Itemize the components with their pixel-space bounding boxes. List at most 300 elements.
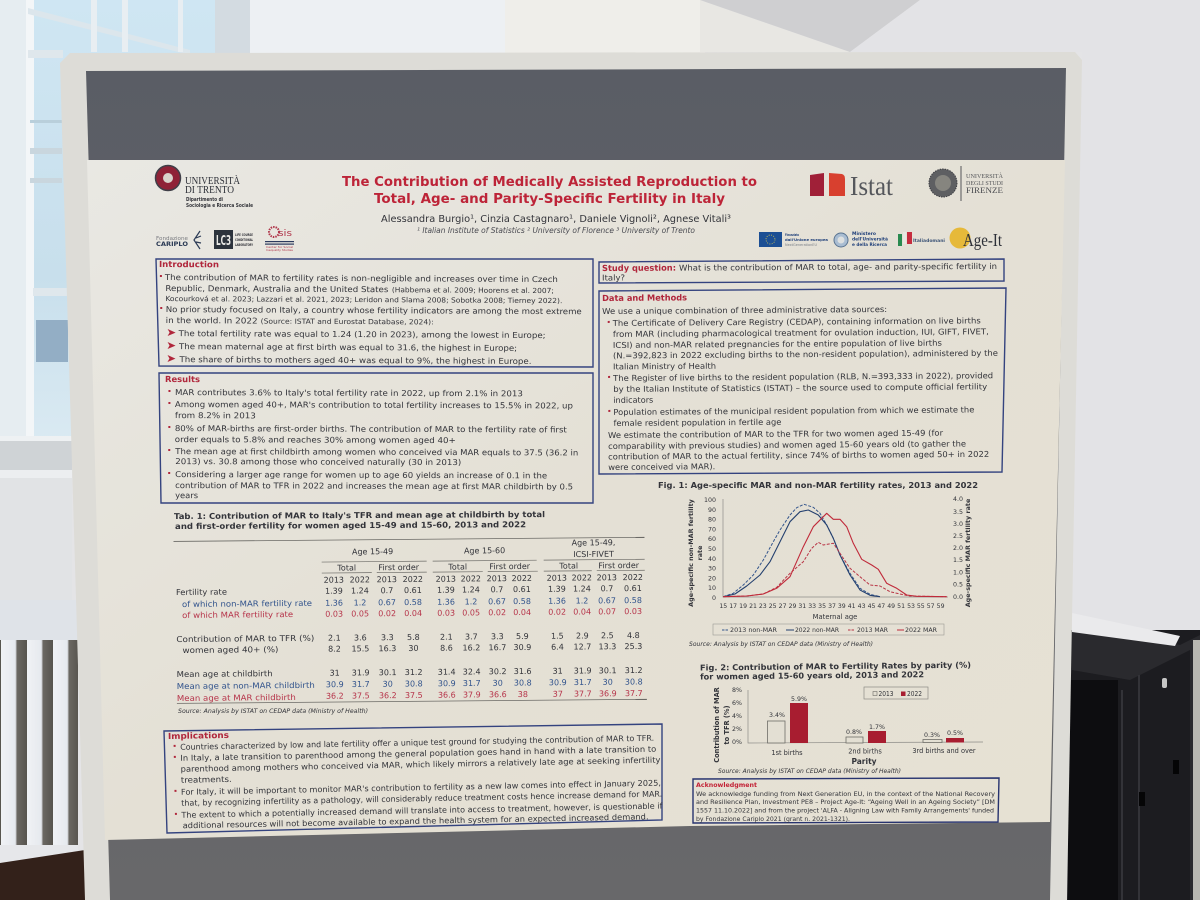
figure 2 source: Source: Analysis by ISTAT on CEDAP data (Ministry of Health) bbox=[718, 767, 901, 775]
logo: Università degli Studi di Firenze bbox=[929, 166, 1003, 201]
series: 2013 MAR bbox=[723, 542, 947, 597]
logo: CSIS: sis bbox=[278, 229, 292, 239]
text: results bullets: years bbox=[175, 491, 198, 500]
panel: study question: What is the contribution of MAR to total, age- and parity-specific fertility in bbox=[679, 262, 997, 273]
heading: implications: Implications bbox=[168, 730, 229, 741]
logo: LC3: CONDITIONAL bbox=[235, 238, 254, 242]
panel: results bbox=[159, 373, 593, 503]
bars: 1st births: 5.9% bbox=[791, 696, 807, 703]
header: title: Total, Age- and Parity-Specific Fertility in Italy bbox=[374, 191, 725, 207]
row: non-MAR fertility rate: 1.2 bbox=[465, 597, 477, 606]
x axis ticks: 37 bbox=[828, 603, 836, 610]
row: MAR fertility rate: 0.05 bbox=[462, 608, 480, 618]
row: contribution of MAR to TFR: 3.7 bbox=[465, 632, 478, 641]
row: non-MAR fertility rate: 0.58 bbox=[404, 598, 422, 607]
table 1 bbox=[173, 510, 647, 715]
text: intro bullets: (Source: ISTAT and Eurostat Database, 2024): bbox=[261, 318, 434, 326]
x axis ticks: 17 bbox=[729, 603, 737, 610]
row: women aged 40+: 16.3 bbox=[378, 644, 396, 653]
row: fertility rate: 0.61 bbox=[624, 584, 642, 593]
row: MAR fertility rate: 0.07 bbox=[598, 607, 616, 616]
right axis ticks: 0.5 bbox=[953, 582, 963, 588]
row: mean age at MAR childbirth: 36.9 bbox=[599, 689, 617, 698]
row: mean age at childbirth: Mean age at childbirth bbox=[177, 669, 273, 679]
panel: implications bbox=[164, 722, 663, 833]
row: fertility rate: 1.39 bbox=[437, 586, 455, 595]
row: non-MAR fertility rate: 0.58 bbox=[513, 597, 531, 606]
legend bbox=[864, 687, 928, 699]
logo: EU funding bbox=[759, 232, 829, 247]
text: implications bullets: additional resources will not become available to expand the health system for an expected increased demand. bbox=[183, 812, 649, 830]
table title bbox=[174, 510, 545, 531]
text: data sources: female resident population in fertile age bbox=[613, 418, 782, 428]
axis titles: Age-specific non-MAR fertility bbox=[687, 498, 695, 607]
left axis ticks: 10 bbox=[708, 585, 716, 592]
column headers: 2022 bbox=[403, 575, 423, 584]
logo: Università di Trento bbox=[156, 166, 254, 209]
row: mean age at childbirth: 31.9 bbox=[352, 668, 370, 677]
y axis title: to TFR (%) bbox=[723, 706, 731, 744]
row: mean age at non-MAR childbirth bbox=[177, 677, 643, 691]
row: non-MAR fertility rate: of which non-MAR fertility rate bbox=[182, 599, 312, 609]
legend: 2022 non-MAR bbox=[795, 627, 840, 634]
text: results bullets: Considering a larger age range for women up to age 60 yields an increase of 0.1 in the bbox=[175, 470, 547, 480]
row: mean age at non-MAR childbirth: 31.7 bbox=[352, 680, 370, 689]
text: results bullets: The mean age at first childbirth among women who conceived via MAR equals to 37.5 (36.2 in bbox=[174, 447, 578, 457]
row: MAR fertility rate bbox=[182, 607, 642, 620]
legend: 2022 bbox=[907, 690, 922, 698]
row: non-MAR fertility rate: 1.36 bbox=[437, 598, 455, 607]
row: women aged 40+: 25.3 bbox=[624, 642, 642, 651]
axis titles: Age-specific MAR fertility rate bbox=[964, 498, 972, 607]
row: mean age at non-MAR childbirth: 30.9 bbox=[438, 679, 456, 688]
row: fertility rate: 1.24 bbox=[573, 584, 591, 594]
text: implications bullets: that, by recognizing infertility as a pathology, will considerably reduce treatment costs hence increase demand for MAR. bbox=[181, 790, 662, 808]
text: estimation approach bbox=[608, 428, 989, 472]
logo: LC3: LABORATORY bbox=[235, 243, 253, 247]
row: fertility rate bbox=[176, 584, 642, 597]
left axis ticks: 50 bbox=[708, 546, 716, 553]
bars: 3rd births and over: 0.3% bbox=[924, 732, 940, 739]
table title: Tab. 1: Contribution of MAR to Italy's TFR and mean age at childbirth by total bbox=[174, 510, 545, 521]
row: women aged 40+: 16.7 bbox=[488, 643, 506, 652]
heading: results: Results bbox=[165, 374, 200, 384]
logo: Università di Trento: Sociologia e Ricerca Sociale bbox=[186, 203, 254, 209]
table title: and first-order fertility for women aged 15-49 and 15-60, 2013 and 2022 bbox=[175, 520, 526, 531]
logo: Fondazione Cariplo: Fondazione bbox=[156, 236, 189, 242]
text: results bullets: 80% of MAR-births are first-order births. The contribution of MAR to the fertility rate of first bbox=[175, 424, 567, 434]
row: non-MAR fertility rate: 1.2 bbox=[354, 598, 366, 607]
row: mean age at childbirth: 31.4 bbox=[438, 668, 456, 677]
row: MAR fertility rate: 0.03 bbox=[325, 610, 343, 619]
row: women aged 40+: 30 bbox=[408, 644, 419, 653]
window bbox=[0, 0, 215, 603]
row: mean age at non-MAR childbirth: 30.8 bbox=[625, 677, 643, 687]
logo: Ministero: Ministero bbox=[852, 231, 876, 236]
text: intro bullets: The mean maternal age at first birth was equal to 31.6, the highest in Europe; bbox=[178, 342, 517, 353]
row: women aged 40+: 6.4 bbox=[551, 643, 564, 652]
heading: introduction: Introduction bbox=[159, 259, 219, 269]
x axis ticks: 43 bbox=[858, 603, 866, 610]
left axis ticks: 80 bbox=[708, 516, 716, 524]
text: data sources: from MAR (including pharmacological treatment for ovulation induction, IUI, GIFT, FIVET, bbox=[613, 327, 989, 339]
row: mean age at non-MAR childbirth: 30 bbox=[383, 680, 393, 689]
row: mean age at childbirth: 31.2 bbox=[625, 666, 643, 675]
text: intro bullets: The share of births to mothers aged 40+ was equal to 9%, the highest in Europe. bbox=[178, 355, 531, 366]
row: women aged 40+: 16.2 bbox=[462, 643, 480, 653]
dark board fabric bbox=[86, 68, 1066, 900]
category labels: 2nd births bbox=[848, 748, 882, 756]
text: results bullets: 2013) vs. 30.8 among those who conceived naturally (30 in 2013) bbox=[175, 457, 461, 467]
x axis ticks: 59 bbox=[937, 603, 945, 610]
row: mean age at childbirth: 31 bbox=[330, 669, 340, 678]
text: intro bullets: No prior study focused on Italy, a country whose fertility indicators are among the most extreme bbox=[166, 305, 582, 316]
row: MAR fertility rate: 0.02 bbox=[488, 608, 506, 617]
text: implications bullets bbox=[174, 734, 663, 830]
series: 2022 non-MAR bbox=[723, 510, 880, 597]
text: estimation approach: were conceived via MAR). bbox=[608, 462, 715, 472]
logo: Università degli Studi di Firenze: DEGLI STUDI bbox=[966, 180, 1003, 187]
row: mean age at non-MAR childbirth: 30.8 bbox=[405, 679, 423, 689]
y ticks: 8% bbox=[732, 687, 742, 694]
row: mean age at non-MAR childbirth: 30 bbox=[493, 679, 503, 688]
x axis ticks: 35 bbox=[818, 603, 826, 610]
header: title: The Contribution of Medically Assisted Reproduction to bbox=[342, 174, 757, 190]
row: mean age at MAR childbirth: Mean age at MAR childbirth bbox=[177, 693, 296, 703]
row: women aged 40+ bbox=[182, 642, 642, 655]
right axis ticks: 3.0 bbox=[953, 521, 963, 528]
logo: CSIS bbox=[265, 227, 294, 252]
row: fertility rate: 0.61 bbox=[513, 585, 531, 594]
logo: Università degli Studi di Firenze: FIRENZE bbox=[966, 186, 1003, 195]
figure 2 title: Fig. 2: Contribution of MAR to Fertility Rates by parity (%) bbox=[700, 661, 971, 672]
text: data sources bbox=[602, 304, 999, 428]
bars: 1st births bbox=[768, 696, 808, 743]
axes bbox=[748, 690, 983, 743]
text: estimation approach: contribution of MAR to the actual fertility, since 74% of births to women aged 50+ in 2022 bbox=[608, 450, 989, 461]
header: title bbox=[342, 174, 757, 207]
panel: study question bbox=[599, 259, 1004, 283]
panel: study question: Italy? bbox=[602, 273, 625, 282]
text: data sources: Population estimates of the municipal resident population from which we estimate the bbox=[613, 405, 974, 417]
column headers: 2022 bbox=[572, 573, 592, 583]
x axis ticks: 15 bbox=[719, 603, 727, 610]
logo: CSIS: Center for Social bbox=[266, 245, 293, 249]
y axis title bbox=[713, 687, 731, 763]
panel: acknowledgment bbox=[693, 778, 999, 823]
row: mean age at MAR childbirth: 37.9 bbox=[463, 690, 481, 699]
text: data sources: The Certificate of Delivery Care Registry (CEDAP), containing information on live births bbox=[612, 316, 981, 328]
row: MAR fertility rate: 0.04 bbox=[573, 607, 591, 617]
row: fertility rate: 0.7 bbox=[491, 585, 503, 594]
x axis ticks: 53 bbox=[907, 603, 915, 610]
legend: 2013 MAR bbox=[857, 627, 889, 634]
logo: Università di Trento: Dipartimento di bbox=[186, 197, 223, 203]
text: results bullets: MAR contributes 3.6% to Italy's total fertility rate in 2022, up from 2.1% in 2013 bbox=[175, 388, 523, 398]
x axis ticks: 29 bbox=[789, 603, 796, 610]
axis titles bbox=[687, 498, 972, 621]
x axis ticks: 45 bbox=[868, 603, 875, 610]
y ticks: 4% bbox=[732, 713, 742, 720]
bars: 3rd births and over: 0.5% bbox=[947, 730, 963, 737]
text: implications bullets: treatments. bbox=[181, 775, 232, 785]
text: data sources: The Register of live births to the resident population (RLB, N.=393,333 in 2022), provided bbox=[612, 371, 993, 383]
row: non-MAR fertility rate: 1.2 bbox=[576, 596, 588, 606]
figure 1: line chart bbox=[658, 481, 978, 648]
logo: LC3: LIFE COURSE bbox=[235, 233, 253, 237]
panel: study question: Study question: bbox=[602, 263, 676, 273]
row: contribution of MAR to TFR: 2.1 bbox=[328, 634, 341, 643]
text: data sources: We use a unique combination of three administrative data sources: bbox=[602, 305, 887, 316]
row: mean age at non-MAR childbirth: 30.8 bbox=[514, 678, 532, 688]
row: mean age at non-MAR childbirth: 30.9 bbox=[549, 678, 567, 687]
row: fertility rate: 0.7 bbox=[381, 586, 393, 595]
row: mean age at MAR childbirth bbox=[177, 689, 643, 703]
right axis ticks bbox=[953, 496, 963, 601]
figure 1 title: Fig. 1: Age-specific MAR and non-MAR fertility rates, 2013 and 2022 bbox=[658, 481, 978, 490]
text: results bullets: contribution of MAR to TFR in 2022 and increases the mean age at first MAR childbirth by 0.5 bbox=[175, 481, 573, 491]
logo: Ministero bbox=[834, 231, 888, 247]
logo: Istat: Istat bbox=[850, 171, 893, 201]
x axis ticks: 57 bbox=[927, 603, 935, 610]
row: mean age at MAR childbirth: 36.2 bbox=[326, 692, 344, 701]
column headers bbox=[323, 538, 643, 585]
figure 2 title bbox=[700, 661, 971, 681]
row: non-MAR fertility rate: 0.67 bbox=[488, 597, 506, 606]
row: contribution of MAR to TFR: 1.5 bbox=[551, 632, 564, 641]
axes bbox=[723, 499, 948, 597]
bars: 1st births: 3.4% bbox=[769, 712, 785, 719]
row: contribution of MAR to TFR: 4.8 bbox=[627, 631, 640, 640]
right axis ticks: 1.5 bbox=[953, 557, 963, 564]
row: non-MAR fertility rate: 0.67 bbox=[378, 598, 396, 607]
category labels: 3rd births and over bbox=[912, 747, 976, 755]
text: implications bullets: The extent to which a potentially increased demand will translate into access to treatment, however, is questionable if bbox=[180, 802, 663, 820]
bars: 2nd births bbox=[846, 724, 886, 743]
legend bbox=[713, 624, 944, 635]
row: mean age at childbirth: 32.4 bbox=[463, 667, 481, 677]
rules bbox=[173, 537, 647, 704]
row: mean age at MAR childbirth: 38 bbox=[518, 690, 528, 699]
x axis ticks: 41 bbox=[848, 603, 856, 610]
text: data sources: by the Italian Institute of Statistics (ISTAT) – the source used to compute official fertility bbox=[613, 382, 987, 394]
y ticks: 2% bbox=[732, 726, 742, 733]
radiator bbox=[0, 600, 85, 900]
left axis ticks: 70 bbox=[708, 526, 716, 534]
row: contribution of MAR to TFR: 3.3 bbox=[381, 633, 394, 642]
column headers: 2013 bbox=[487, 574, 507, 583]
logo: Fondazione Cariplo: CARIPLO bbox=[156, 241, 188, 248]
text: intro bullets: in the world. In 2022 bbox=[166, 316, 258, 326]
row: women aged 40+: 12.7 bbox=[573, 642, 591, 652]
row: mean age at childbirth: 31.9 bbox=[574, 666, 592, 676]
text: implications bullets: parenthood among mothers who conceived via MAR, which likely mirrors a relatively late age at seeking infertility bbox=[180, 756, 661, 774]
row: women aged 40+: 15.5 bbox=[351, 644, 369, 653]
logo: Università di Trento: DI TRENTO bbox=[185, 184, 234, 196]
bars: 2nd births: 0.8% bbox=[846, 729, 862, 736]
column headers: 2013 bbox=[377, 575, 397, 584]
y ticks: 6% bbox=[732, 700, 742, 707]
network cabinet bbox=[1067, 613, 1200, 900]
affiliations: ¹ Italian Institute of Statistics ² University of Florence ³ University of Trento bbox=[417, 226, 695, 235]
row: contribution of MAR to TFR: 2.1 bbox=[440, 633, 453, 642]
authors: Alessandra Burgio¹, Cinzia Castagnaro¹, Daniele Vignoli², Agnese Vitali³ bbox=[381, 214, 731, 225]
text: data sources: Italian Ministry of Health bbox=[613, 362, 716, 371]
heading: acknowledgment: Acknowledgment bbox=[696, 781, 757, 789]
row: mean age at childbirth: 31 bbox=[553, 667, 563, 676]
left axis ticks: 40 bbox=[708, 556, 716, 563]
column headers: 2022 bbox=[512, 574, 532, 583]
logo: Ministero: dell'Università bbox=[852, 236, 888, 242]
row: mean age at non-MAR childbirth: 31.7 bbox=[463, 679, 481, 688]
text: intro bullets bbox=[159, 273, 582, 366]
row: fertility rate: 0.7 bbox=[601, 584, 613, 593]
text: intro bullets: Republic, Denmark, Australia and the United States bbox=[165, 284, 388, 294]
legend: 2013 bbox=[878, 690, 894, 698]
row: fertility rate: 1.39 bbox=[548, 585, 566, 594]
right axis ticks: 0.0 bbox=[953, 594, 963, 601]
text: acknowledgment: 1557 11.10.2022] and from the project 'ALFA - Aligning Law with Family Arrangements' funded bbox=[696, 806, 994, 814]
bars: 2nd births: 1.7% bbox=[869, 724, 885, 731]
row: non-MAR fertility rate: 0.58 bbox=[624, 596, 642, 605]
logo: Age-It: Age-It bbox=[963, 230, 1002, 250]
row: non-MAR fertility rate bbox=[182, 596, 642, 609]
right axis ticks: 2.5 bbox=[953, 533, 963, 540]
column headers: 2013 bbox=[324, 576, 344, 585]
figure 1 source: Source: Analysis by ISTAT on CEDAP data (Ministry of Health) bbox=[689, 640, 873, 648]
text: acknowledgment: by Fondazione Cariplo 2021 (grant n. 2021-1321). bbox=[696, 815, 850, 823]
row: contribution of MAR to TFR: 5.9 bbox=[516, 632, 529, 641]
y axis title: Contribution of MAR bbox=[713, 687, 721, 763]
row: mean age at childbirth: 30.2 bbox=[489, 667, 507, 676]
row: mean age at non-MAR childbirth: 30.9 bbox=[326, 680, 344, 689]
row: contribution of MAR to TFR: 3.3 bbox=[491, 632, 504, 641]
row: women aged 40+: 13.3 bbox=[598, 642, 616, 651]
row: mean age at MAR childbirth: 37.7 bbox=[574, 689, 592, 699]
logo: Ministero: e della Ricerca bbox=[852, 242, 887, 247]
row: MAR fertility rate: 0.05 bbox=[351, 609, 369, 618]
row: MAR fertility rate: 0.03 bbox=[437, 609, 455, 618]
row: MAR fertility rate: of which MAR fertility rate bbox=[182, 610, 293, 620]
figure 2: bar chart bbox=[700, 661, 983, 775]
bars: 3rd births and over bbox=[923, 730, 964, 742]
panel: data and methods bbox=[599, 288, 1006, 474]
x axis ticks: 39 bbox=[838, 603, 846, 610]
column headers: ICSI-FIVET bbox=[573, 550, 614, 559]
logo: CSIS: Inequality Studies bbox=[266, 248, 293, 252]
row: mean age at childbirth: 31.6 bbox=[514, 667, 532, 676]
column headers: 2013 bbox=[547, 574, 567, 583]
logo: Age-It bbox=[950, 228, 1002, 250]
column headers: 2022 bbox=[461, 574, 481, 584]
left axis ticks: 20 bbox=[708, 576, 716, 582]
column headers: Total bbox=[447, 562, 467, 572]
text: results bullets: from 8.2% in 2013 bbox=[175, 411, 256, 420]
category labels bbox=[771, 747, 976, 766]
row: women aged 40+: 8.6 bbox=[440, 644, 453, 653]
row: mean age at MAR childbirth: 36.6 bbox=[438, 691, 456, 700]
series: 2013 non-MAR bbox=[723, 504, 880, 597]
category labels: Parity bbox=[851, 757, 877, 766]
text: intro bullets: Kocourková et al. 2023; Lazzari et al. 2021, 2023; Leridon and Slama 2008; Sobotka 2008; Tierney 2022). bbox=[165, 295, 562, 305]
left axis ticks bbox=[704, 497, 716, 602]
text: implications bullets: In Italy, a late transition to parenthood among the general population goes hand in hand with a late transition to bbox=[180, 745, 656, 763]
x axis ticks: 21 bbox=[749, 603, 757, 610]
text: intro bullets: (Habbema et al. 2009; Hoorens et al. 2007; bbox=[392, 286, 554, 295]
figure 2 title: for women aged 15-60 years old, 2013 and 2022 bbox=[700, 670, 924, 681]
left axis ticks: 90 bbox=[708, 507, 716, 514]
table source: Source: Analysis by ISTAT on CEDAP data (Ministry of Health) bbox=[178, 707, 368, 715]
left axis ticks: 0 bbox=[712, 595, 716, 602]
column headers: First order bbox=[378, 563, 420, 572]
row: mean age at childbirth: 30.1 bbox=[599, 666, 617, 675]
row: fertility rate: 0.61 bbox=[404, 586, 422, 595]
axis titles: rate bbox=[696, 545, 704, 560]
text: estimation approach: comparability with previous studies) and women aged 15-60 years old (to gather the bbox=[608, 439, 966, 451]
text: results bullets bbox=[168, 388, 578, 501]
panel: introduction bbox=[156, 259, 593, 367]
column headers: First order bbox=[598, 561, 640, 570]
row: mean age at childbirth: 30.1 bbox=[379, 668, 397, 677]
row: contribution of MAR to TFR: 5.8 bbox=[407, 633, 420, 642]
text: implications bullets: For Italy, it will be important to monitor MAR's contribution to fertility as a new law comes into effect in January 2025, bbox=[181, 779, 661, 797]
row: contribution of MAR to TFR bbox=[176, 631, 640, 644]
column headers: 2022 bbox=[350, 575, 370, 584]
row: contribution of MAR to TFR: 3.6 bbox=[354, 633, 367, 642]
left axis ticks: 30 bbox=[708, 566, 716, 572]
text: data sources: (N.=392,823 in 2022 excluding births to the non-resident population), administered by the bbox=[613, 349, 998, 360]
row: contribution of MAR to TFR: 2.5 bbox=[601, 631, 614, 640]
x axis ticks: 27 bbox=[779, 603, 787, 610]
row: non-MAR fertility rate: 1.36 bbox=[548, 597, 566, 606]
logo: LC3: LC3 bbox=[216, 234, 231, 249]
series: 2022 MAR bbox=[723, 513, 947, 597]
text: acknowledgment bbox=[696, 790, 995, 823]
column headers: Age 15-49 bbox=[352, 547, 393, 556]
logo: EU funding: Finanziato bbox=[785, 233, 799, 237]
text: implications bullets: Countries characterized by low and late fertility offer a unique test ground for studying the contribution of MAR to TFR. bbox=[180, 734, 654, 752]
right axis ticks: 2.0 bbox=[953, 545, 963, 552]
column headers: First order bbox=[489, 562, 531, 571]
right axis ticks: 3.5 bbox=[953, 509, 963, 516]
x axis ticks: 51 bbox=[897, 603, 905, 610]
x axis ticks: 55 bbox=[917, 603, 925, 610]
row: women aged 40+: 30.9 bbox=[513, 643, 531, 652]
row: non-MAR fertility rate: 0.67 bbox=[598, 596, 616, 605]
row: mean age at non-MAR childbirth: 30 bbox=[603, 678, 613, 687]
row: mean age at MAR childbirth: 36.6 bbox=[489, 690, 507, 699]
row: mean age at childbirth: 31.2 bbox=[405, 668, 423, 677]
row: fertility rate: 1.24 bbox=[462, 585, 480, 595]
logo: Italiadomani: Italiadomani bbox=[913, 238, 945, 244]
text: results bullets: order equals to 5.8% and reaches 30% among women aged 40+ bbox=[175, 435, 456, 445]
y ticks: 0% bbox=[732, 739, 742, 746]
row: contribution of MAR to TFR: Contribution of MAR to TFR (%) bbox=[176, 634, 314, 644]
column headers: 2022 bbox=[623, 573, 643, 582]
text: data sources: indicators bbox=[613, 396, 653, 405]
text: intro bullets: The total fertility rate was equal to 1.24 (1.20 in 2023), among the lowest in Europe; bbox=[178, 329, 546, 340]
row: mean age at MAR childbirth: 36.2 bbox=[379, 691, 397, 700]
y ticks bbox=[732, 687, 742, 746]
row: MAR fertility rate: 0.03 bbox=[624, 607, 642, 616]
logo: Istat bbox=[810, 171, 893, 201]
column headers: Age 15-49, bbox=[572, 538, 615, 548]
text: estimation approach: We estimate the contribution of MAR to the TFR for two women aged 15-49 (for bbox=[608, 429, 944, 440]
row: mean age at MAR childbirth: 37 bbox=[553, 690, 563, 699]
logo: Università di Trento: UNIVERSITÀ bbox=[185, 175, 240, 187]
text: data sources: ICSI) and non-MAR related pregnancies for the entire population of live births bbox=[613, 339, 942, 350]
logo: Università degli Studi di Firenze: UNIVERSITÀ bbox=[966, 172, 1003, 180]
